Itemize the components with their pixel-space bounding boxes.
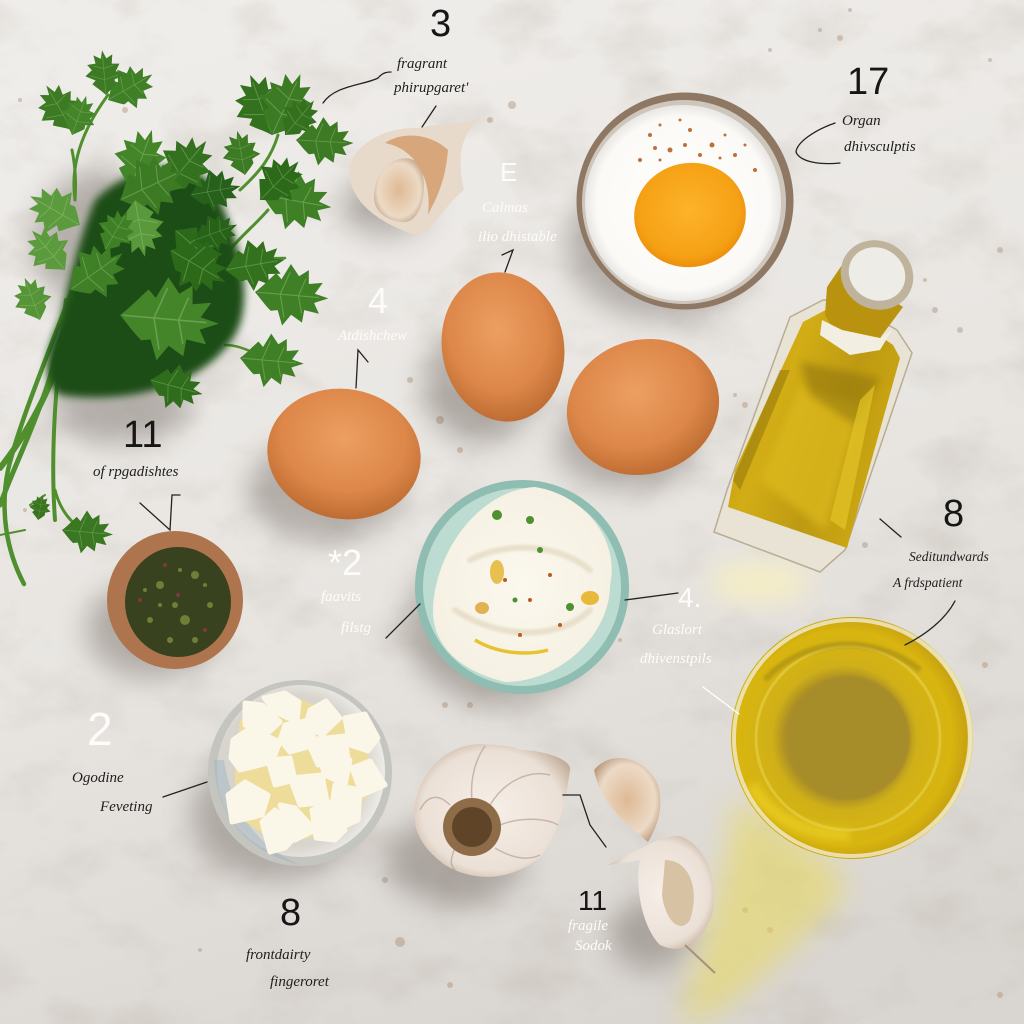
label: feta bottom: frontdairty <box>246 947 311 963</box>
oil bottle <box>710 227 926 602</box>
oil spill glow <box>680 795 843 1024</box>
parsley stems <box>0 95 285 584</box>
label: garlic side: ilio dhistable <box>478 229 557 245</box>
label: yogurt right: 4. <box>678 582 701 613</box>
label: yogurt left: *2 <box>328 542 362 583</box>
label: top right <box>796 61 916 164</box>
garlic clove top <box>349 117 482 235</box>
label: garlic bottom: Sodok <box>575 938 612 954</box>
bottle liquid <box>728 305 900 548</box>
eggs <box>257 263 737 531</box>
garlic cloves <box>594 758 715 973</box>
yolk <box>624 152 756 278</box>
label: garlic side: Calmas <box>482 200 528 216</box>
egg white <box>585 105 781 301</box>
yogurt bowl <box>415 480 629 694</box>
garlic root <box>443 798 501 856</box>
label: feta left <box>72 703 207 815</box>
label: egg <box>337 280 407 388</box>
label: feta bottom <box>246 892 330 990</box>
egg centre <box>430 263 576 431</box>
label: oil right <box>880 493 989 645</box>
label: feta bottom: 8 <box>280 892 301 934</box>
label: garlic side <box>478 157 557 272</box>
parsley dark mass <box>47 166 244 398</box>
label: top right: 17 <box>847 61 889 103</box>
label: yogurt left: filstg <box>341 620 372 636</box>
label: yogurt right: dhivenstpils <box>640 651 712 667</box>
feta chunks <box>228 693 385 852</box>
label: top right: Organ <box>842 113 881 129</box>
bowl rim <box>576 92 794 310</box>
fried egg bowl <box>576 92 794 310</box>
feta bowl <box>208 680 392 866</box>
label: left herb <box>93 414 180 530</box>
label: top fragrant: fragrant <box>397 56 448 72</box>
glass oil bowl <box>680 617 973 1024</box>
label: oil right: Seditundwards <box>909 549 989 564</box>
soft shadows <box>35 170 755 970</box>
pepper specks <box>638 118 757 172</box>
label: feta left: Feveting <box>99 799 153 815</box>
label: yogurt right <box>625 582 739 714</box>
label: feta left: 2 <box>87 703 113 755</box>
label: top fragrant: 3 <box>430 3 451 45</box>
garlic bulb <box>414 744 570 877</box>
label: left herb: 11 <box>123 414 162 456</box>
yogurt swirl shading <box>455 548 590 632</box>
bottle glass body <box>714 300 912 572</box>
egg left <box>257 377 431 531</box>
herb bowl <box>107 531 243 669</box>
label: top fragrant <box>323 3 469 127</box>
feta yellow base <box>235 695 380 845</box>
label: egg: Atdishchew <box>337 328 407 344</box>
egg right <box>549 319 737 495</box>
label: yogurt right: Glaslort <box>652 622 703 638</box>
bottle neck <box>825 265 903 338</box>
garlic striations <box>420 746 558 870</box>
label: oil right: A frdspatient <box>892 575 964 590</box>
label: garlic bottom: fragile <box>568 918 608 934</box>
parsley bunch <box>0 49 355 584</box>
label: yogurt left <box>321 542 420 638</box>
label: feta bottom: fingeroret <box>270 974 330 990</box>
parsley leaves <box>7 49 355 556</box>
label: garlic bottom: 11 <box>578 885 607 916</box>
label: top fragrant: phirupgaret' <box>393 80 469 96</box>
label: yogurt left: faavits <box>321 589 361 605</box>
label: egg: 4 <box>368 280 388 321</box>
label: top right: dhivsculptis <box>844 139 916 155</box>
label: feta left: Ogodine <box>72 770 124 786</box>
label: garlic bottom <box>563 795 612 954</box>
label: garlic side: E <box>500 157 517 187</box>
oil and herbs <box>475 510 599 653</box>
label: oil right: 8 <box>943 493 964 535</box>
label: left herb: of rpgadishtes <box>93 464 179 480</box>
